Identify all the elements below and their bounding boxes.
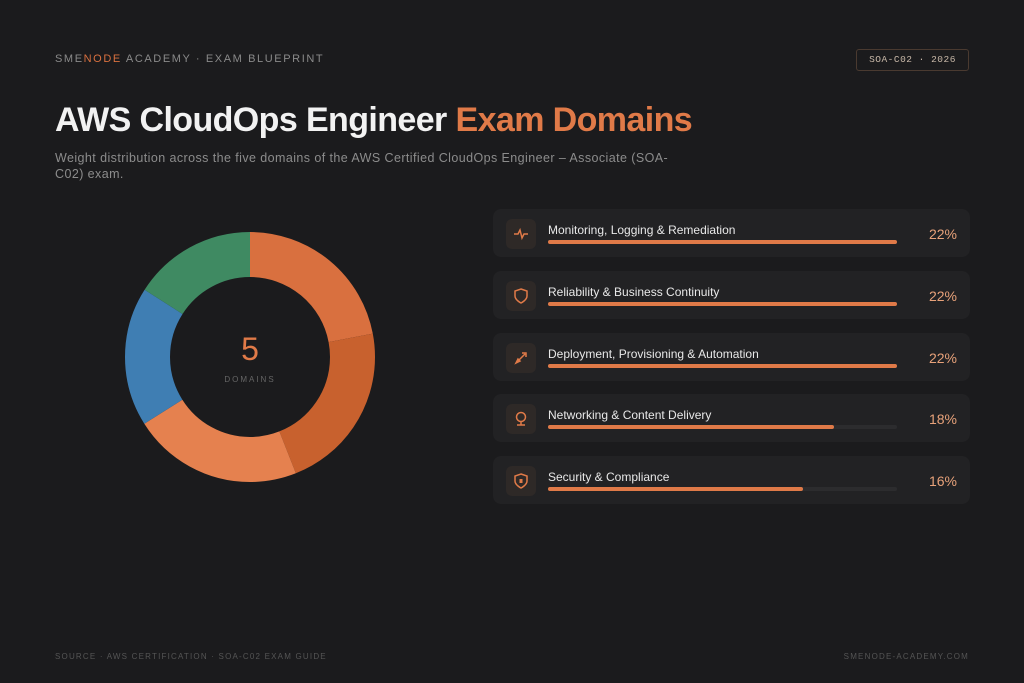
card: networking: Networking & Content Delivery (548, 408, 711, 422)
card: monitoring: Monitoring, Logging & Remediation (548, 223, 735, 237)
subtitle: C02) exam. (55, 167, 124, 181)
card: monitoring: 22% (929, 226, 957, 242)
donut chart: 5 (241, 331, 259, 367)
card: reliability: 22% (929, 288, 957, 304)
badge: SOA-C02 · 2026 (869, 54, 956, 65)
header eyebrow: SMENODE ACADEMY · EXAM BLUEPRINT (55, 53, 324, 65)
card: security (493, 456, 970, 504)
card: deployment: 22% (929, 350, 957, 366)
card: monitoring (493, 209, 970, 257)
card: reliability: Reliability & Business Continuity (548, 285, 719, 299)
footer source: SOURCE · AWS CERTIFICATION · SOA-C02 EXAM GUIDE (55, 652, 327, 661)
card: security: Security & Compliance (548, 470, 669, 484)
card: security: 16% (929, 473, 957, 489)
badge (856, 49, 969, 71)
card: networking: 18% (929, 411, 957, 427)
footer site: SMENODE-ACADEMY.COM (844, 652, 969, 661)
subtitle (55, 151, 668, 181)
card: deployment: Deployment, Provisioning & Automation (548, 347, 759, 361)
donut chart (125, 232, 375, 482)
title: AWS CloudOps Engineer Exam Domains (55, 101, 692, 139)
donut chart: DOMAINS (224, 375, 276, 384)
card: reliability (493, 271, 970, 319)
subtitle: Weight distribution across the five domains of the AWS Certified CloudOps Engineer – Associate (SOA- (55, 151, 668, 165)
card: networking (493, 394, 970, 442)
card: deployment (493, 333, 970, 381)
